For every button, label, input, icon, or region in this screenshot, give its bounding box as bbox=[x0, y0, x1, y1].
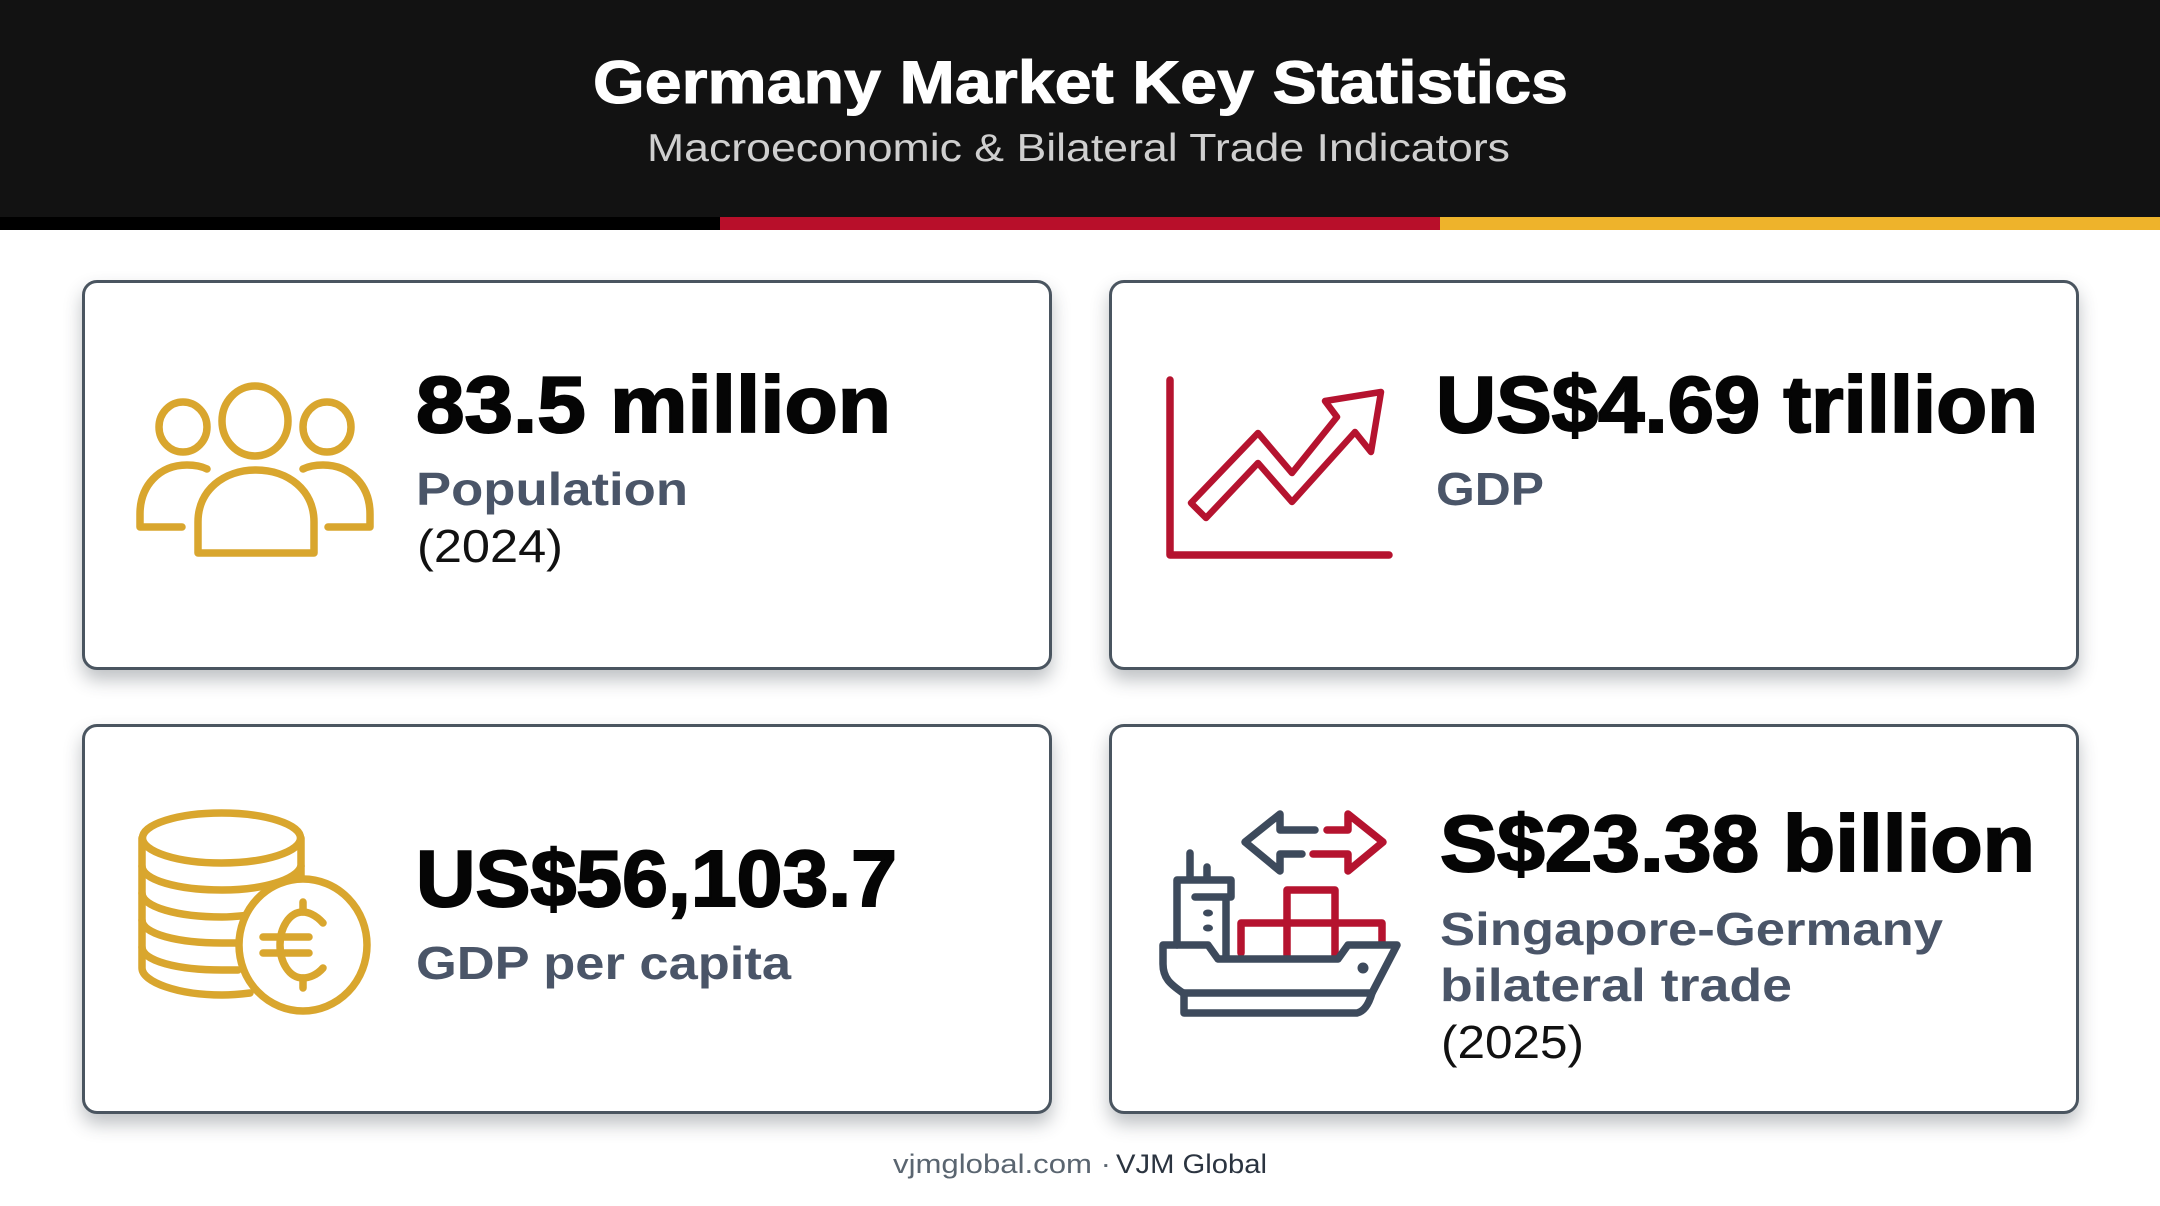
label: GDP per capita bbox=[416, 937, 791, 989]
header band bbox=[0, 0, 2160, 230]
title: Germany Market Key Statistics bbox=[593, 49, 1568, 116]
year: (2025) bbox=[1441, 1016, 1584, 1068]
icon: euro coins bbox=[142, 813, 367, 1011]
label: Population bbox=[416, 463, 688, 515]
icon: cargo ship with trade arrows bbox=[1163, 814, 1397, 1013]
title and subtitle bbox=[593, 49, 1568, 170]
panel: population bbox=[82, 280, 1052, 670]
panel: GDP per capita bbox=[82, 724, 1052, 1114]
source site: vjmglobal.com · bbox=[893, 1149, 1111, 1179]
panel: bilateral trade bbox=[1109, 724, 2079, 1114]
value: US$4.69 trillion bbox=[1436, 360, 2038, 449]
subtitle: Macroeconomic & Bilateral Trade Indicators bbox=[647, 127, 1510, 170]
icon: people group bbox=[140, 386, 370, 553]
footer bbox=[893, 1149, 1267, 1179]
value: S$23.38 billion bbox=[1440, 799, 2035, 888]
value: 83.5 million bbox=[416, 360, 891, 449]
icon: rising chart bbox=[1170, 380, 1389, 555]
label line one: Singapore-Germany bbox=[1440, 903, 1943, 955]
panel: GDP bbox=[1109, 280, 2079, 670]
label: GDP bbox=[1436, 463, 1544, 515]
brand: VJM Global bbox=[1116, 1149, 1267, 1179]
label line two: bilateral trade bbox=[1440, 959, 1792, 1011]
value: US$56,103.7 bbox=[416, 834, 897, 923]
year: (2024) bbox=[417, 520, 563, 572]
flag colour stripe bbox=[0, 217, 2160, 230]
